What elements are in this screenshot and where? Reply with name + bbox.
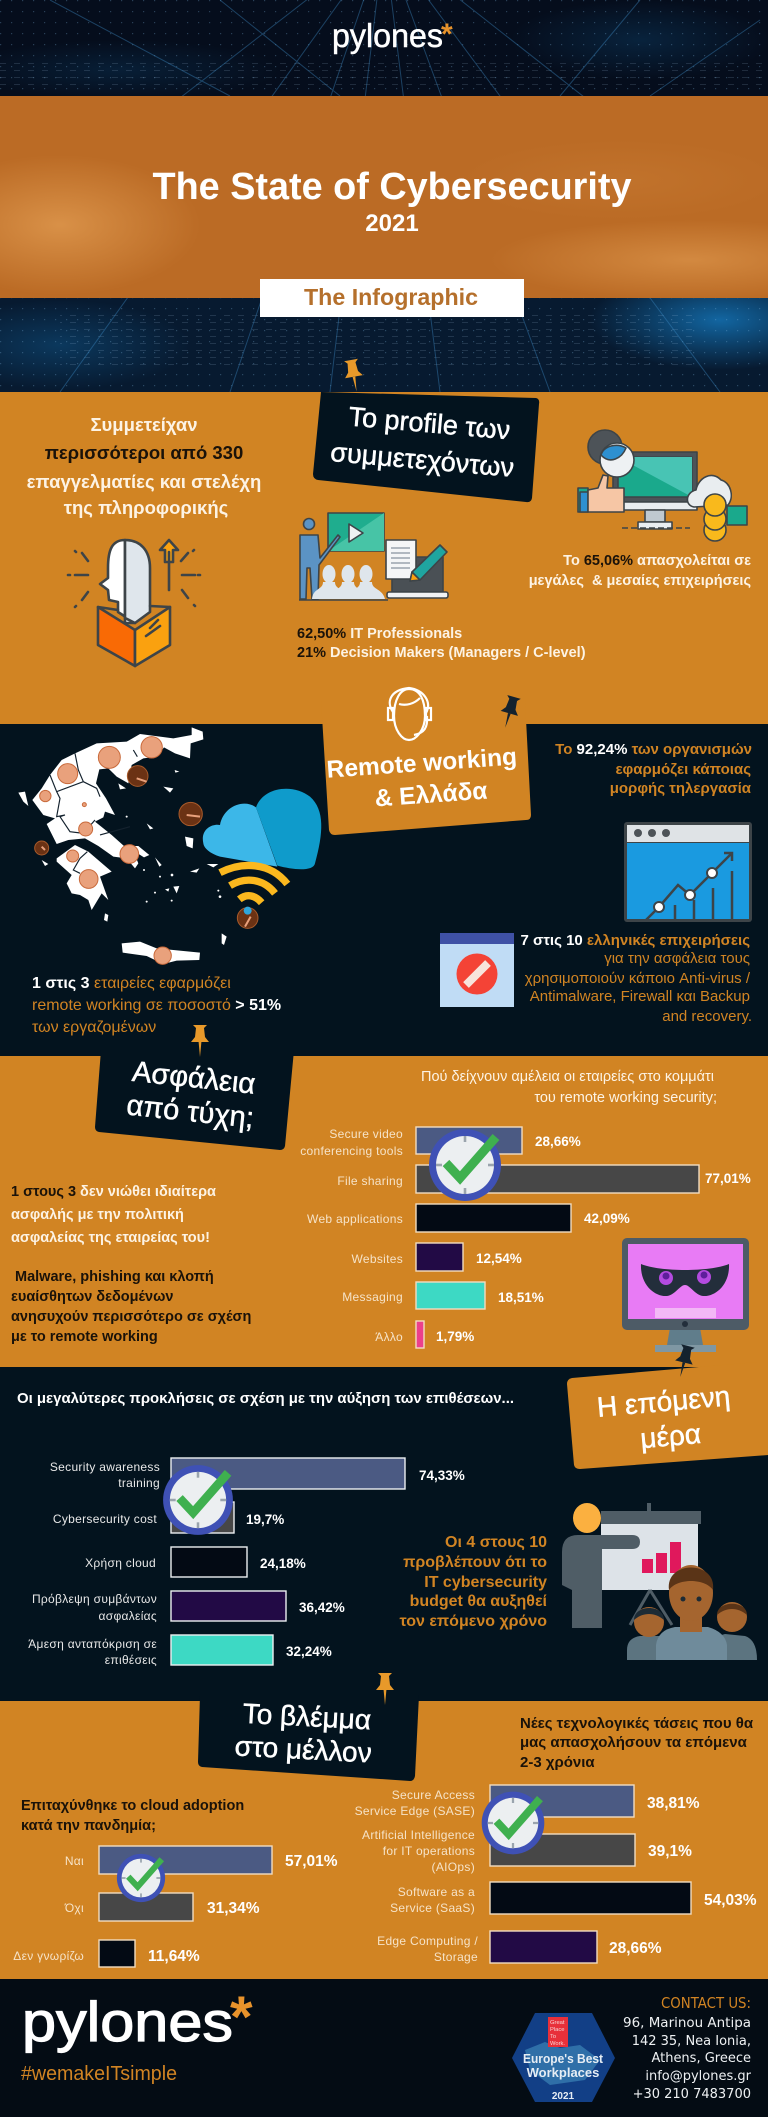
- text: 4 in 10 budget: τον επόμενο χρόνο: [400, 1613, 547, 1630]
- bar chart: technology trends: for IT operations: [383, 1844, 475, 1858]
- bar chart: technology trends: [355, 1785, 757, 1964]
- header logo: *: [441, 18, 453, 51]
- bar chart: technology trends: Software as a: [398, 1885, 475, 1899]
- text: 7 in 10: 7 στις 10 ελληνικές επιχειρήσεις: [520, 932, 750, 949]
- bar chart: remote working security negligence: Άλλο: [375, 1330, 403, 1344]
- text: 65,06%: [529, 553, 751, 589]
- contact details: [623, 1994, 752, 2102]
- bar chart: challenges: Χρήση cloud: [85, 1556, 156, 1570]
- text: over 330 professionals: Συμμετείχαν: [90, 414, 198, 435]
- icon: monitor with masked eyes: [622, 1238, 749, 1352]
- bar chart: remote working security negligence: 77,01%: [705, 1171, 751, 1186]
- text: 1 in 3 does not feel safe: 1 στους 3 δεν νιώθει ιδιαίτερα: [11, 1184, 216, 1200]
- badge: future heading: [198, 1695, 419, 1781]
- icon: presenter and audience: [562, 1503, 757, 1660]
- text: 1 in 3 does not feel safe: ανησυχούν περισσότερο σε σχέση: [11, 1309, 251, 1325]
- footer logo: *: [230, 1985, 253, 2050]
- icon: orange pin security: [191, 1025, 209, 1057]
- contact details: CONTACT US:: [661, 1994, 751, 2012]
- badge: Europe's Best Workplaces: Europe's Best: [523, 2051, 604, 2066]
- badge: Europe's Best Workplaces: To: [550, 2034, 556, 2040]
- footer logo: pylones: [22, 1990, 233, 2053]
- text: 92,24%: μορφής τηλεργασία: [610, 780, 752, 797]
- text: 4 in 10 budget: IT cybersecurity: [424, 1574, 547, 1591]
- badge: Europe's Best Workplaces: Place: [550, 2027, 565, 2033]
- text: 1 in 3 does not feel safe: [11, 1184, 251, 1345]
- bar chart: challenges: 32,24%: [286, 1644, 332, 1659]
- bar chart: technology trends: Service (SaaS): [390, 1901, 475, 1915]
- text: 1 in 3 companies: [32, 975, 281, 1036]
- bar chart: remote working security negligence: [300, 1127, 751, 1348]
- badge: profile heading: [313, 392, 539, 502]
- text: over 330 professionals: της πληροφορικής: [64, 497, 228, 518]
- badge: next day heading: μέρα: [639, 1418, 702, 1454]
- text: 1 in 3 companies: 1 στις 3 εταιρείες εφαρμόζει: [32, 975, 231, 992]
- text: cloud adoption question: Επιταχύνθηκε το cloud adoption: [21, 1798, 244, 1814]
- text: cloud adoption question: κατά την πανδημία;: [21, 1818, 156, 1834]
- bar chart: technology trends: (AIOps): [432, 1860, 475, 1874]
- bar chart: technology trends: 39,1%: [648, 1843, 692, 1860]
- badge: remote working heading: & Ελλάδα: [374, 778, 488, 812]
- hashtag: #wemakeITsimple: [21, 2063, 177, 2085]
- panel: the next day: [0, 1362, 768, 1701]
- footer: [0, 1979, 768, 2117]
- text: 1 in 3 companies: των εργαζομένων: [32, 1019, 156, 1036]
- icon: clock check: [117, 1854, 165, 1902]
- bar chart: cloud adoption: Όχι: [64, 1901, 84, 1915]
- bar chart: remote working security negligence: Web applications: [307, 1212, 403, 1226]
- text: 1 in 3 does not feel safe: Malware, phishing και κλοπή: [15, 1269, 214, 1285]
- title: The State of Cybersecurity: [152, 166, 632, 208]
- bar chart: challenges: 19,7%: [246, 1512, 284, 1527]
- bar chart: remote working security negligence: Websites: [351, 1252, 403, 1266]
- text: 65,06%: μεγάλες & μεσαίες επιχειρήσεις: [529, 573, 751, 589]
- text: 7 in 10: για την ασφάλεια τους: [604, 950, 750, 967]
- icon: clock check: [163, 1465, 233, 1535]
- text: negligence question: Πού δείχνουν αμέλεια οι εταιρείες στο κομμάτι: [421, 1069, 714, 1085]
- text: 4 in 10 budget: προβλέπουν ότι το: [403, 1554, 547, 1571]
- text: over 330 professionals: επαγγελματίες και στελέχη: [27, 471, 261, 492]
- bar chart: cloud adoption: Ναι: [65, 1854, 84, 1868]
- bar chart: remote working security negligence: Secure video: [329, 1127, 403, 1141]
- bar chart: challenges: Πρόβλεψη συμβάντων: [32, 1592, 157, 1606]
- bar chart: technology trends: Edge Computing /: [377, 1934, 478, 1948]
- text: over 330 professionals: περισσότεροι από 330: [45, 442, 243, 463]
- icon: browser growth chart: [624, 822, 752, 922]
- badge: Europe's Best Workplaces: Great: [550, 2020, 565, 2026]
- title: 2021: [365, 210, 419, 237]
- bar chart: challenges: επιθέσεις: [105, 1653, 157, 1667]
- icon: clock check: [429, 1129, 501, 1201]
- contact details: +30 210 7483700: [633, 2087, 751, 2102]
- bar chart: cloud adoption: 11,64%: [148, 1948, 200, 1965]
- text: IT professionals stats: [297, 626, 586, 661]
- icon: orange pin future: [376, 1673, 394, 1705]
- badge: Europe's Best Workplaces: [512, 2013, 615, 2102]
- icon: cloud: [203, 789, 321, 869]
- text: 65,06%: Το 65,06% απασχολείται σε: [563, 553, 751, 569]
- icon: orange pin top: [342, 358, 365, 393]
- text: 92,24%: εφαρμόζει κάποιας: [615, 761, 751, 778]
- bar chart: cloud adoption: 57,01%: [285, 1853, 338, 1870]
- text: 7 in 10: and recovery.: [662, 1008, 752, 1025]
- text: 1 in 3 companies: remote working σε ποσοστό > 51%: [32, 997, 281, 1014]
- bar chart: cloud adoption: [13, 1846, 338, 1967]
- text: negligence question: του remote working security;: [534, 1090, 717, 1106]
- text: IT professionals stats: 62,50% IT Professionals: [297, 626, 462, 642]
- contact details: 142 35, Nea Ionia,: [632, 2034, 751, 2049]
- bar chart: remote working security negligence: 28,66%: [535, 1134, 581, 1149]
- header background: cyber grid: [0, 0, 768, 394]
- icon: dark pin next day: [672, 1344, 697, 1379]
- bar chart: technology trends: Secure Access: [392, 1788, 475, 1802]
- contact details: 96, Marinou Antipa: [623, 2016, 751, 2031]
- badge: profile heading: Το profile των: [347, 401, 511, 445]
- badge: remote working heading: [321, 688, 531, 835]
- badge: security by chance heading: [95, 1050, 294, 1150]
- badge: next day heading: [567, 1362, 768, 1469]
- text: new technology trends: μας απασχολήσουν τα επόμενα: [520, 1734, 748, 1751]
- badge: security by chance heading: από τύχη;: [125, 1090, 255, 1135]
- text: over 330 professionals: [27, 414, 261, 518]
- icon: presentation: [299, 513, 448, 600]
- contact details: info@pylones.gr: [645, 2069, 752, 2084]
- panel: remote working and Greece: [0, 688, 768, 1056]
- text: 1 in 3 does not feel safe: με το remote working: [11, 1329, 158, 1345]
- text: 7 in 10: χρησιμοποιούν κάποιο Anti-virus /: [525, 970, 751, 987]
- bar chart: remote working security negligence: Messaging: [342, 1290, 403, 1304]
- bar chart: remote working security negligence: 12,54%: [476, 1251, 522, 1266]
- bar chart: challenges: training: [118, 1476, 160, 1490]
- title: [152, 166, 632, 237]
- icon: blocked window: [440, 933, 514, 1007]
- badge: Europe's Best Workplaces: Work.: [550, 2041, 565, 2047]
- text: IT professionals stats: 21% Decision Makers (Managers / C-level): [297, 645, 586, 661]
- text: new technology trends: 2-3 χρόνια: [520, 1754, 595, 1771]
- text: 4 in 10 budget: [400, 1534, 547, 1630]
- text: 92,24%: Το 92,24% των οργανισμών: [555, 741, 752, 758]
- bar chart: remote working security negligence: File sharing: [337, 1174, 403, 1188]
- text: 92,24%: [555, 741, 752, 797]
- text: biggest challenges heading: Οι μεγαλύτερες προκλήσεις σε σχέση με την αύξηση των επιθέσεων...: [17, 1390, 514, 1407]
- bar chart: remote working security negligence: 18,51%: [498, 1290, 544, 1305]
- bar chart: technology trends: 54,03%: [704, 1892, 757, 1909]
- badge: profile heading: συμμετεχόντων: [329, 437, 515, 483]
- bar chart: challenges: Cybersecurity cost: [53, 1512, 157, 1526]
- bar chart: technology trends: 28,66%: [609, 1940, 662, 1957]
- icon: clock check: [482, 1792, 544, 1854]
- text: negligence question: [421, 1069, 717, 1106]
- subtitle box: The Infographic: [304, 284, 478, 310]
- map: Greece with regions: [18, 727, 321, 964]
- bar chart: remote working security negligence: conferencing tools: [300, 1144, 403, 1158]
- bar chart: challenges: 24,18%: [260, 1556, 306, 1571]
- badge: future heading: στο μέλλον: [234, 1730, 372, 1768]
- icon: dark pin remote working: [497, 695, 523, 730]
- bar chart: challenges: Άμεση ανταπόκριση σε: [28, 1637, 157, 1651]
- contact details: Athens, Greece: [651, 2051, 751, 2066]
- bar chart: challenges: [28, 1458, 465, 1667]
- bar chart: remote working security negligence: 42,09%: [584, 1211, 630, 1226]
- bar chart: challenges: Security awareness: [50, 1460, 160, 1474]
- text: 1 in 3 does not feel safe: ασφαλής με την πολιτική: [11, 1207, 184, 1223]
- text: 1 in 3 does not feel safe: ευαίσθητων δεδομένων: [11, 1289, 173, 1305]
- text: new technology trends: [520, 1715, 754, 1771]
- badge: security by chance heading: Ασφάλεια: [131, 1056, 257, 1101]
- text: 7 in 10: [520, 932, 752, 1025]
- bar chart: cloud adoption: 31,34%: [207, 1900, 260, 1917]
- bar chart: challenges: ασφαλείας: [98, 1609, 157, 1623]
- panel: security by chance: [0, 1050, 768, 1367]
- badge: Europe's Best Workplaces: Workplaces: [527, 2065, 599, 2080]
- bar chart: cloud adoption: Δεν γνωρίζω: [13, 1949, 84, 1963]
- icon: wifi: [220, 865, 287, 915]
- bar chart: technology trends: Storage: [434, 1950, 478, 1964]
- badge: future heading: Το βλέμμα: [242, 1698, 372, 1735]
- text: 7 in 10: Antimalware, Firewall και Backup: [530, 988, 750, 1005]
- text: 4 in 10 budget: Οι 4 στους 10: [445, 1534, 547, 1551]
- icon: head in open book: [68, 540, 200, 666]
- bar chart: technology trends: 38,81%: [647, 1795, 700, 1812]
- badge: next day heading: Η επόμενη: [596, 1380, 731, 1423]
- text: 1 in 3 does not feel safe: ασφαλείας της εταιρείας του!: [11, 1230, 210, 1246]
- badge: Europe's Best Workplaces: 2021: [552, 2091, 575, 2102]
- bar chart: technology trends: Artificial Intelligence: [362, 1828, 475, 1842]
- bar chart: technology trends: Service Edge (SASE): [355, 1804, 475, 1818]
- icon: headset person: [388, 688, 431, 740]
- text: cloud adoption question: [21, 1798, 244, 1834]
- header logo: pylones: [332, 17, 443, 54]
- text: 4 in 10 budget: budget θα αυξηθεί: [410, 1593, 547, 1610]
- panel: look to the future: [0, 1695, 768, 1979]
- bar chart: challenges: 74,33%: [419, 1468, 465, 1483]
- subtitle box: [260, 279, 524, 317]
- bar chart: challenges: 36,42%: [299, 1600, 345, 1615]
- icon: monitor, bubbles, thumb, cloud, coins: [578, 430, 747, 541]
- text: new technology trends: Νέες τεχνολογικές τάσεις που θα: [520, 1715, 754, 1732]
- header orange title band: [0, 96, 768, 300]
- bar chart: remote working security negligence: 1,79%: [436, 1329, 474, 1344]
- panel: participants profile: [0, 392, 768, 724]
- badge: remote working heading: Remote working: [326, 743, 518, 784]
